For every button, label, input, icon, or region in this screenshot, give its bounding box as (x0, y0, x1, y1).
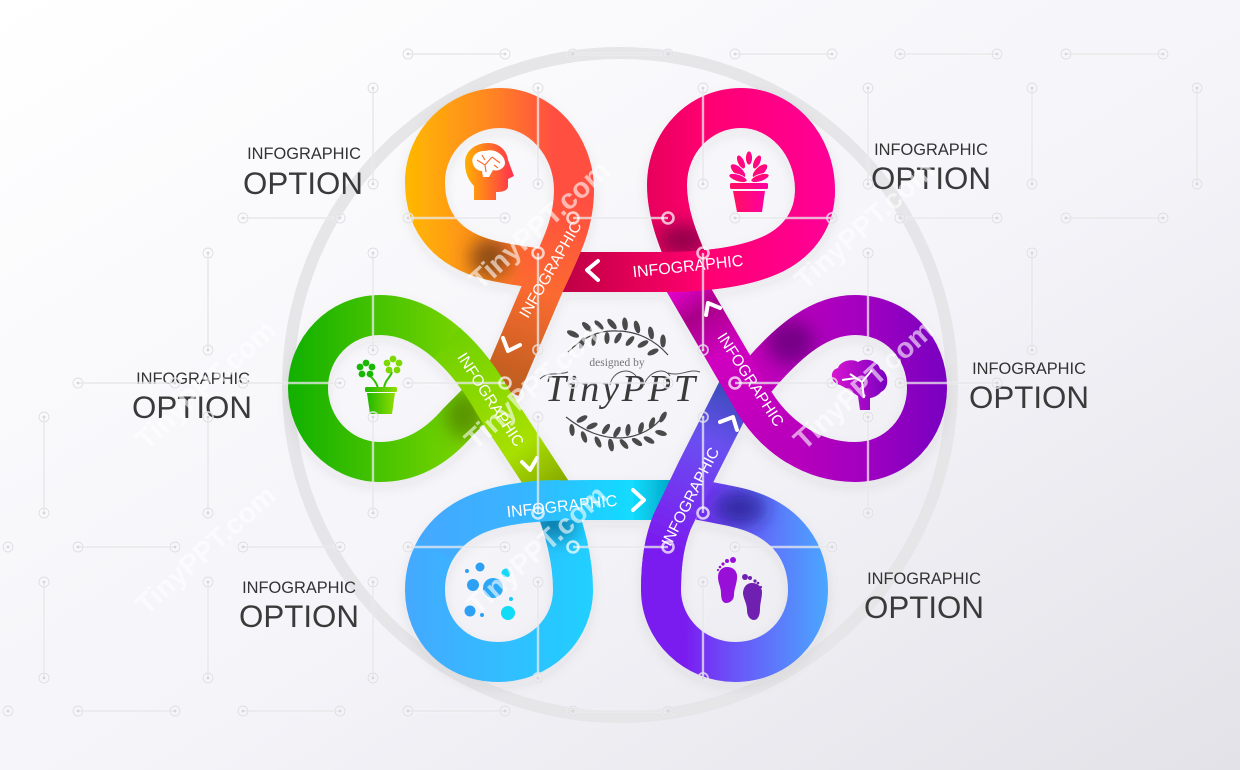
text block: option middle right (969, 360, 1089, 415)
text block: option top left: OPTION (243, 166, 363, 201)
watermarks (130, 154, 941, 621)
icon: footprints (717, 557, 762, 620)
text block: option top right: INFOGRAPHIC (874, 141, 988, 159)
icon: purple brain (832, 360, 887, 410)
text block: option bottom left: OPTION (239, 599, 359, 634)
ribbon: orange loop (425, 108, 574, 388)
ribbon: pink loop (555, 108, 815, 272)
logo: lower laurel (566, 411, 668, 452)
arrow: purple tail (706, 303, 720, 315)
text block: option bottom left: INFOGRAPHIC (242, 579, 356, 597)
icon: bubbles (464, 562, 515, 620)
ribbon: purple loop (683, 280, 927, 462)
watermarks: TinyPPT.com (459, 314, 611, 456)
icon: head with brain (465, 143, 514, 200)
text block: option middle left (132, 370, 252, 425)
large outer ring (288, 53, 952, 717)
text block: option top right: OPTION (871, 161, 991, 196)
ribbon: green loop (308, 315, 552, 492)
ribbon text: green: INFOGRAPHIC (453, 350, 527, 450)
icon: succulent in pot (728, 151, 770, 212)
text block: option bottom left (239, 579, 359, 634)
arrow: green tail (522, 458, 537, 470)
ribbon text: orange: INFOGRAPHIC (517, 219, 585, 321)
logo: upper laurel (566, 317, 668, 357)
text block: option bottom right: OPTION (864, 590, 984, 625)
ribbon text: violet: INFOGRAPHIC (659, 445, 723, 549)
arrow: violet tail (720, 417, 737, 430)
watermarks: TinyPPT.com (464, 154, 616, 296)
text block: option middle left: INFOGRAPHIC (136, 370, 250, 388)
text block: option top right (871, 141, 991, 196)
logo: designed by: designed by (589, 357, 645, 369)
watermarks: TinyPPT.com (130, 314, 282, 456)
text block: option middle right: OPTION (969, 380, 1089, 415)
watermarks: TinyPPT.com (789, 154, 941, 296)
center logo (540, 317, 700, 452)
arrow: pink band (587, 261, 598, 280)
chevron arrows (503, 261, 737, 510)
icon: flowers in pot (357, 356, 402, 414)
arrow: orange tail (503, 338, 520, 351)
text block: option bottom right (864, 570, 984, 625)
ribbon: light blue loop (425, 498, 680, 662)
text block: option middle right: INFOGRAPHIC (972, 360, 1086, 378)
text block: option middle left: OPTION (132, 390, 252, 425)
text block: option top left (243, 145, 363, 201)
arrow: light blue band (633, 490, 644, 510)
ribbon: violet loop (661, 385, 808, 662)
ribbon flower diagram (308, 108, 927, 662)
watermarks: TinyPPT.com (130, 479, 282, 621)
ribbon: green tail overlap (474, 372, 510, 428)
ribbon labels (453, 219, 787, 549)
ribbon text: purple: INFOGRAPHIC (713, 330, 787, 430)
ribbon text: pink: INFOGRAPHIC (632, 253, 744, 281)
text block: option top left: INFOGRAPHIC (247, 145, 361, 163)
text block: option bottom right: INFOGRAPHIC (867, 570, 981, 588)
watermarks: TinyPPT.com (788, 314, 940, 456)
logo: TinyPPT script: TinyPPT (545, 368, 698, 410)
ribbon text: light blue: INFOGRAPHIC (506, 493, 618, 521)
logo: script swashes (540, 371, 700, 385)
watermarks: TinyPPT.com (461, 479, 613, 621)
